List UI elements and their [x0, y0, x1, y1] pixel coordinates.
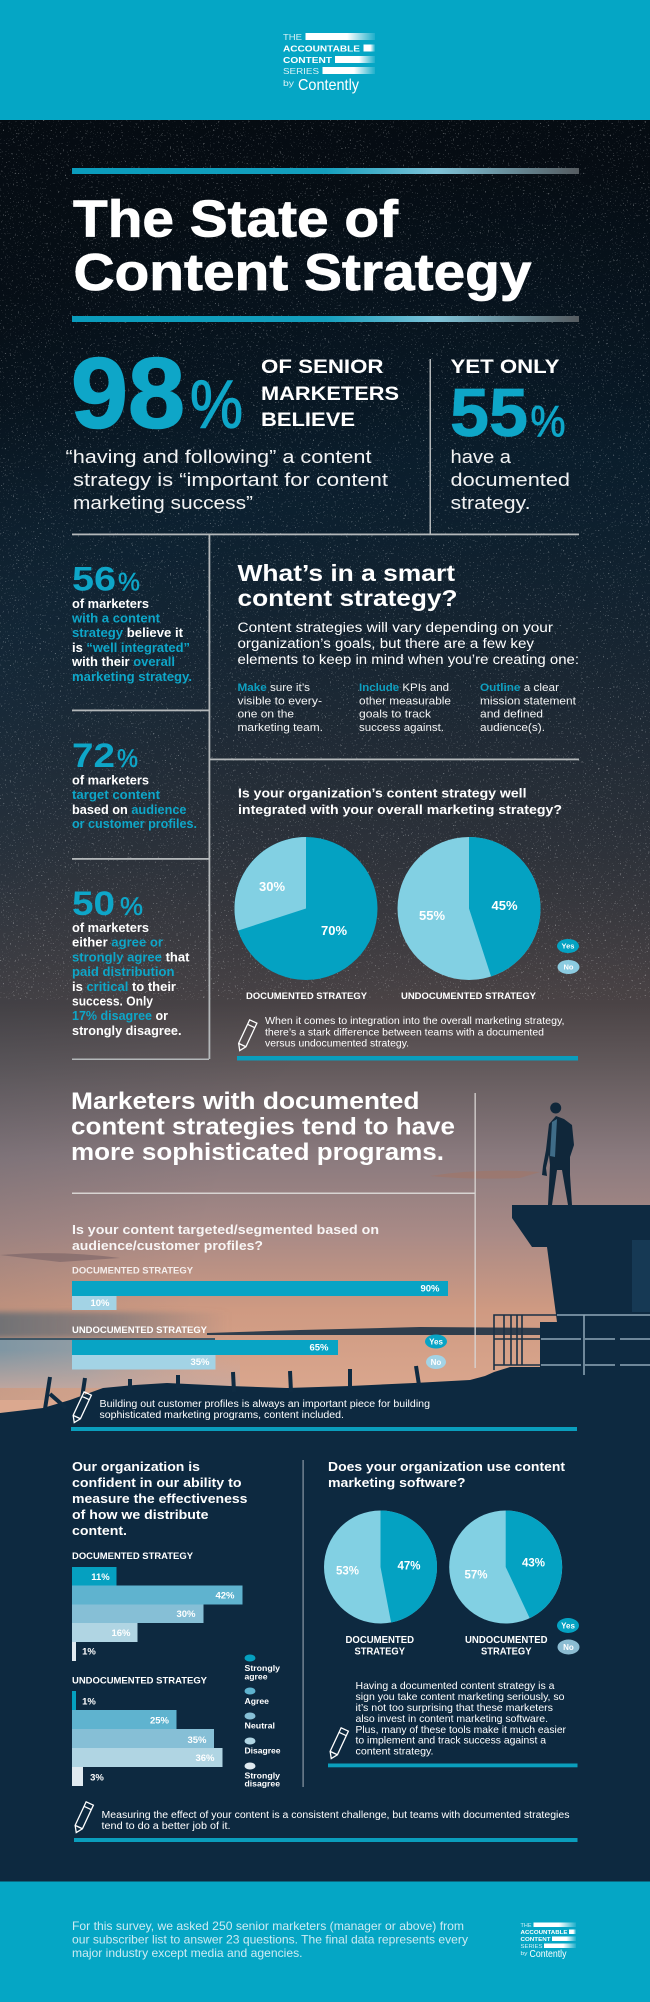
column: include: other measurable [359, 696, 451, 708]
chart question: Is your organization’s content strategy well [238, 786, 526, 800]
stacked bars: documented strategy: 30% [176, 1609, 196, 1620]
column: make: visible to every- [238, 696, 322, 708]
note text: sign you take content marketing seriously, so [356, 1692, 565, 1703]
stat: 50% paid distribution: paid distribution [72, 965, 174, 979]
column: include: Include KPIs and [359, 682, 449, 694]
legend: agreement scale: disagree [244, 1780, 280, 1788]
headline stat: 55%: YET ONLY [450, 356, 560, 378]
logo: small Contently series mark [520, 1922, 576, 1960]
chart question [72, 1459, 248, 1538]
section: what's in a smart content strategy [238, 560, 579, 734]
section heading: sophisticated programs [71, 1088, 455, 1166]
pie labels [346, 1635, 548, 1658]
logo: The Accountable Content Series by Contently: SERIES [283, 66, 319, 76]
chart question [328, 1459, 566, 1490]
logo: small Contently series mark: ACCOUNTABLE [520, 1930, 568, 1936]
section heading: sophisticated programs: content strategies tend to have [71, 1114, 455, 1140]
note text [100, 1399, 430, 1421]
icon: pencil [73, 1802, 93, 1834]
bars: documented strategy: 10% [90, 1298, 110, 1309]
pie chart: documented strategy [234, 837, 378, 980]
chart question: measure the effectiveness [72, 1491, 248, 1506]
note text: versus undocumented strategy. [265, 1038, 409, 1050]
stacked bars: undocumented strategy: 3% [90, 1772, 104, 1784]
pie chart: documented strategy [324, 1510, 437, 1624]
headline stat: 98%: MARKETERS [261, 383, 399, 405]
headline stat: 98%: “having and following” a content [66, 446, 372, 467]
intro text [238, 620, 579, 667]
stacked bars: documented strategy: 42% [215, 1590, 235, 1602]
headline stat: 98%: OF SENIOR [261, 356, 384, 378]
note text: Building out customer profiles is always an important piece for building [100, 1399, 430, 1410]
legend: agreement scale: Strongly [244, 1664, 280, 1673]
column: outline: mission statement [480, 696, 576, 708]
stat: 72% target content: 72 [72, 737, 115, 775]
legend: agreement scale: agree [244, 1672, 268, 1682]
stat: 50% paid distribution: success. Only [72, 994, 153, 1008]
stat: 56% well integrated: of marketers [72, 597, 149, 611]
bars: undocumented strategy: UNDOCUMENTED STRATEGY [72, 1325, 208, 1336]
headline stat: 98% [66, 338, 399, 513]
chart question [238, 786, 562, 817]
pie labels: STRATEGY [481, 1646, 532, 1658]
logo: The Accountable Content Series by Contently [283, 32, 375, 94]
headline stat: 55%: have a [450, 446, 512, 467]
headline stat: 98%: BELIEVE [261, 409, 355, 431]
bars: undocumented strategy: 35% [190, 1357, 210, 1368]
legend: agreement scale [244, 1654, 281, 1788]
stat: 72% target content: target content [72, 788, 161, 802]
survey methodology text: major industry except media and agencies. [72, 1946, 302, 1960]
headline stat: 55%: strategy. [450, 492, 530, 513]
intro text: Content strategies will vary depending on your [238, 620, 554, 635]
stat: 50% paid distribution: either agree or [72, 936, 163, 950]
icon: pencil [71, 1392, 91, 1424]
chart question: content. [72, 1523, 127, 1538]
stacked bars: documented strategy: 1% [82, 1646, 96, 1658]
pie chart: undocumented strategy: 43% [522, 1558, 545, 1570]
note text: also invest in content marketing software. [356, 1714, 548, 1725]
fence posts [45, 1366, 419, 1409]
pie chart: documented strategy: 70% [321, 923, 347, 938]
survey methodology text: For this survey, we asked 250 senior marketers (manager or above) from [72, 1919, 464, 1933]
legend yes/no: Yes [561, 1622, 575, 1630]
stat: 56% well integrated: with their overall [71, 655, 175, 669]
lower gradient rule [72, 316, 579, 322]
stacked bars: undocumented strategy: UNDOCUMENTED STRATEGY [72, 1676, 208, 1686]
stat: 56% well integrated: marketing strategy. [72, 670, 192, 684]
man standing on the platform [542, 1102, 574, 1205]
column: make: marketing team. [238, 722, 323, 734]
section heading: sophisticated programs: more sophisticated programs. [71, 1139, 444, 1166]
chart question: audience/customer profiles? [72, 1238, 263, 1253]
stat: 72% target content: based on audience [72, 803, 187, 817]
stat: 72% target content: or customer profiles. [72, 817, 197, 831]
logo: The Accountable Content Series by Contently: CONTENT [283, 55, 333, 65]
legend: agreement scale: Neutral [244, 1722, 275, 1730]
stat: 50% paid distribution: strongly disagree. [72, 1024, 182, 1038]
pie labels: DOCUMENTED STRATEGY [246, 991, 368, 1002]
railing [494, 1315, 557, 1370]
column: make [238, 682, 323, 734]
logo: small Contently series mark: CONTENT [520, 1937, 551, 1943]
logo: The Accountable Content Series by Contently: Contently [298, 77, 359, 94]
landscape silhouette: ground, fence, building and man [0, 1102, 650, 1900]
stat: 56% well integrated: with a content [71, 612, 161, 626]
legend yes/no [557, 939, 580, 974]
stacked bars: documented strategy [72, 1551, 242, 1661]
stacked bars: undocumented strategy: 35% [187, 1735, 207, 1746]
pie chart: undocumented strategy [398, 837, 541, 980]
legend yes/no: Yes [429, 1338, 443, 1346]
note text [102, 1810, 570, 1832]
stat: 56% well integrated: 56 [72, 560, 116, 598]
title [73, 190, 532, 302]
bars: documented strategy: DOCUMENTED STRATEGY [72, 1266, 194, 1276]
pie chart: documented strategy: 30% [259, 879, 285, 894]
heading: What’s in a smart [238, 560, 455, 586]
intro text: organization’s goals, but there are a few key [238, 636, 534, 651]
top gradient rule [72, 168, 579, 174]
pie labels: STRATEGY [354, 1646, 405, 1658]
column: include [359, 682, 451, 734]
logo: The Accountable Content Series by Contently: THE [283, 32, 302, 42]
chart question: Is your content targeted/segmented based on [72, 1222, 379, 1237]
pie chart: documented strategy: 53% [336, 1566, 359, 1578]
stat: 72% target content [72, 737, 197, 831]
logo: small Contently series mark: by [520, 1951, 528, 1957]
note text: it’s not too surprising that these marketers [356, 1703, 553, 1714]
legend: agreement scale: Strongly [244, 1772, 280, 1780]
bars: documented strategy [72, 1266, 448, 1310]
legend yes/no: No [564, 962, 574, 972]
stat: 50% paid distribution [72, 885, 190, 1038]
stat: 50% paid distribution: of marketers [72, 921, 149, 935]
icon: pencil [328, 1728, 348, 1760]
stacked bars: undocumented strategy: 1% [82, 1696, 96, 1708]
pie chart: undocumented strategy: 55% [419, 908, 445, 923]
note text: Measuring the effect of your content is a consistent challenge, but teams with documented strategies [102, 1810, 570, 1821]
chart section: targeted content bars [71, 1222, 577, 1431]
title: The State of [73, 190, 399, 248]
bars: undocumented strategy: 65% [309, 1342, 329, 1354]
note text: there’s a stark difference between teams with a documented [265, 1028, 544, 1038]
legend yes/no [425, 1334, 447, 1369]
stat: 72% target content: % [117, 745, 138, 773]
chart question: integrated with your overall marketing strategy? [238, 802, 562, 817]
column: outline [480, 682, 576, 734]
headline stat: 55%: % [530, 397, 566, 446]
note text: Plus, many of these tools make it much easier [356, 1725, 567, 1736]
headline stat: 55%: documented [450, 469, 570, 490]
survey methodology text [72, 1919, 468, 1960]
stacked bars: documented strategy: 16% [111, 1628, 131, 1639]
pie labels: UNDOCUMENTED STRATEGY [401, 991, 537, 1002]
note rule [74, 1838, 578, 1842]
note rule [328, 1764, 578, 1767]
ground silhouette [0, 1367, 650, 1900]
headline stat: 98%: strategy is “important for content [73, 469, 388, 490]
chart question: Our organization is [72, 1459, 200, 1474]
pie labels: DOCUMENTED [346, 1635, 414, 1646]
legend yes/no [557, 1618, 580, 1654]
logo: The Accountable Content Series by Contently: ACCOUNTABLE [283, 44, 360, 54]
stat: 56% well integrated [71, 560, 192, 684]
stacked bars: documented strategy: DOCUMENTED STRATEGY [72, 1551, 194, 1562]
note text: content strategy. [356, 1746, 434, 1758]
stacked bars: undocumented strategy [72, 1676, 222, 1786]
column: make: Make sure it’s [238, 682, 311, 694]
headline stat: 55% [450, 356, 570, 513]
section heading: sophisticated programs: Marketers with documented [71, 1088, 420, 1115]
legend yes/no: Yes [562, 942, 574, 950]
column: include: success against. [359, 722, 444, 734]
logo: small Contently series mark: SERIES [520, 1944, 543, 1950]
stat: 56% well integrated: % [118, 568, 140, 596]
stat: 50% paid distribution: 50 [72, 885, 115, 923]
stat: 56% well integrated: strategy believe it [72, 626, 184, 640]
chart section: integration pies [234, 786, 579, 1060]
stat: 50% paid distribution: % [120, 893, 143, 921]
survey methodology text: our subscriber list to answer 23 questions. The final data represents every [72, 1932, 468, 1946]
note rule [237, 1056, 578, 1060]
chart question: of how we distribute [72, 1507, 208, 1522]
headline stat: 98%: % [190, 366, 243, 442]
stacked bars: undocumented strategy: 36% [195, 1753, 215, 1764]
building [512, 1205, 650, 1370]
stat: 56% well integrated: is “well integrated” [72, 641, 190, 655]
note text: to implement and track success against a [356, 1736, 546, 1746]
title: Content Strategy [74, 244, 532, 302]
legend yes/no: No [431, 1358, 441, 1367]
chart section: content marketing software [324, 1459, 580, 1767]
stacked bars: documented strategy: 11% [91, 1572, 110, 1583]
pie chart: undocumented strategy: 45% [491, 898, 518, 913]
stat: 72% target content: of marketers [72, 774, 149, 788]
bars: documented strategy: 90% [420, 1284, 440, 1294]
stat: 50% paid distribution: is critical to their [72, 980, 176, 994]
top banner [0, 0, 650, 120]
stacked bars: undocumented strategy: 25% [150, 1716, 170, 1726]
pie chart: undocumented strategy [449, 1510, 562, 1624]
chart question: confident in our ability to [72, 1475, 242, 1490]
pie labels [246, 991, 537, 1002]
heading [238, 560, 458, 611]
footer band [0, 1882, 650, 2002]
chart question: marketing software? [328, 1475, 466, 1490]
chart question: Does your organization use content [328, 1459, 566, 1474]
legend: agreement scale: Agree [244, 1697, 269, 1706]
note text [356, 1681, 567, 1758]
note text [265, 1016, 564, 1050]
legend yes/no: No [563, 1643, 574, 1652]
heading: content strategy? [238, 585, 458, 611]
chart section: confidence in measuring [72, 1459, 281, 1788]
pie chart: undocumented strategy: 57% [464, 1570, 488, 1582]
note text: Having a documented content strategy is a [356, 1681, 555, 1692]
legend: agreement scale: Disagree [244, 1746, 281, 1756]
column: outline: audience(s). [480, 722, 545, 734]
column: make: one on the [238, 708, 294, 720]
pie chart: documented strategy: 47% [397, 1560, 421, 1572]
note text: When it comes to integration into the overall marketing strategy, [265, 1016, 564, 1027]
logo: small Contently series mark: THE [520, 1923, 532, 1929]
section divider lines [72, 1093, 476, 1368]
measurement note [73, 1802, 577, 1842]
headline stat: 98%: marketing success” [73, 492, 253, 513]
stat: 50% paid distribution: 17% disagree or [72, 1009, 168, 1023]
icon: pencil [236, 1020, 257, 1052]
note text: tend to do a better job of it. [102, 1821, 230, 1832]
chart question [72, 1222, 379, 1253]
intro text: elements to keep in mind when you’re creating one: [238, 652, 579, 667]
pie labels: UNDOCUMENTED [465, 1635, 548, 1646]
column: outline: and defined [480, 708, 543, 720]
column: outline: Outline a clear [480, 682, 559, 694]
note rule [71, 1427, 577, 1431]
column: include: goals to track [359, 708, 432, 720]
logo: small Contently series mark: Contently [530, 1949, 566, 1960]
note text: sophisticated marketing programs, content included. [100, 1410, 344, 1421]
vertical divider [302, 1460, 304, 1787]
headline stat: 98%: 98 [71, 338, 185, 450]
headline stat: 55%: 55 [450, 375, 528, 451]
divider lines top section [72, 359, 579, 1060]
bars: undocumented strategy [72, 1325, 338, 1370]
stat: 50% paid distribution: strongly agree that [72, 950, 190, 964]
logo: The Accountable Content Series by Contently: by [283, 79, 294, 88]
